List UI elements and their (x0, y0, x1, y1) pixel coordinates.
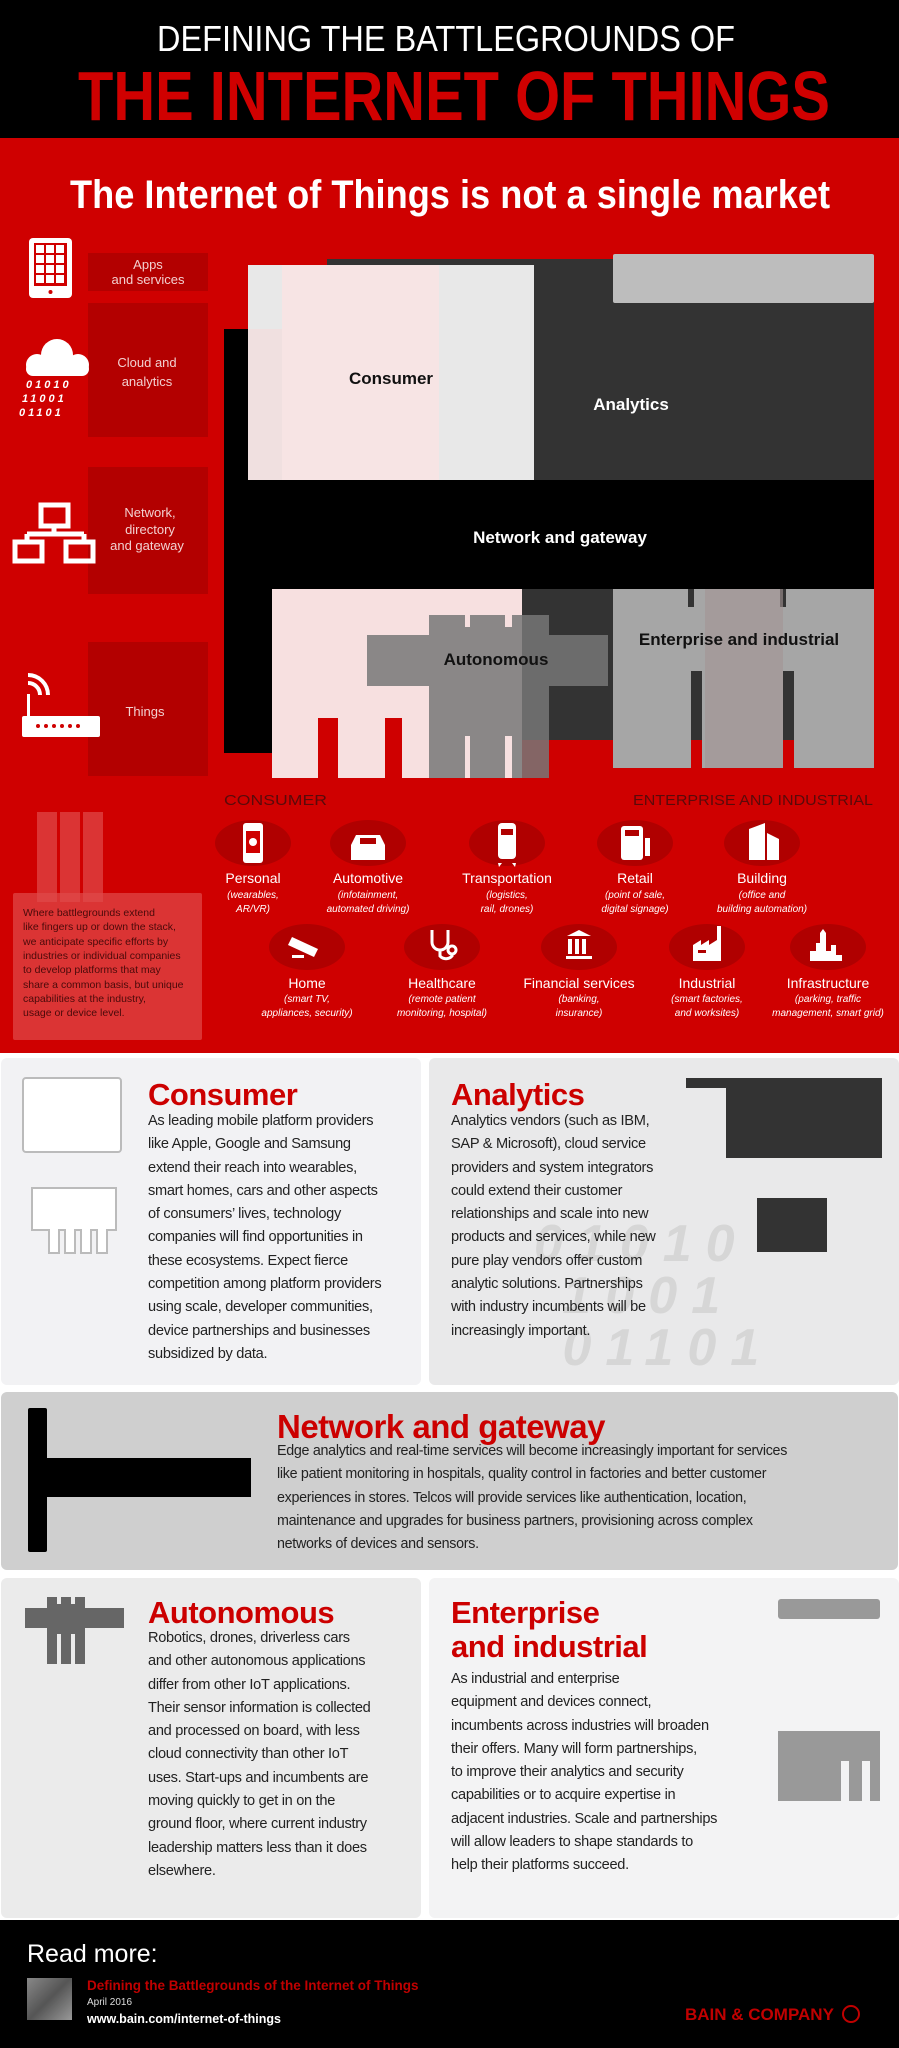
icon row: industries (215, 820, 884, 1019)
panel: analytics: Analytics (451, 1077, 584, 1112)
panel: consumer (1, 1058, 421, 1385)
icon row: industries: digital signage) (601, 904, 669, 915)
icon row: industries: Retail (617, 870, 653, 886)
stack layer: cloud and analytics: analytics (122, 374, 173, 389)
stack layer: things (88, 642, 208, 776)
icon: bank (566, 930, 592, 959)
icon: stethoscope (432, 930, 456, 959)
panel: consumer: As leading mobile platform providers (148, 1113, 373, 1129)
panel: enterprise and industrial: capabilities or to acquire expertise in (451, 1787, 675, 1803)
autonomous block (367, 615, 608, 778)
panel: enterprise and industrial: adjacent industries. Scale and partnerships (451, 1811, 717, 1827)
panel: autonomous: uses. Start-ups and incumbents are (148, 1770, 368, 1786)
analytics block: Analytics (593, 395, 669, 414)
axis labels: CONSUMER (224, 792, 327, 809)
panel: enterprise and industrial: As industrial and enterprise (451, 1671, 619, 1687)
logo: Bain & Company: BAIN & COMPANY (685, 2005, 834, 2024)
stack layer: cloud and analytics (88, 303, 208, 437)
icon row: industries: monitoring, hospital) (397, 1008, 487, 1019)
enterprise block (613, 589, 874, 768)
icon: network hierarchy (15, 505, 93, 561)
panel: network and gateway (1, 1392, 898, 1570)
watermark: binary: 1001 (562, 1267, 734, 1325)
icon row: industries: Building (737, 870, 787, 886)
panel: autonomous: Autonomous (148, 1595, 334, 1630)
callout: fingers note: share a common basis, but unique (23, 979, 184, 991)
panel: enterprise and industrial (429, 1578, 899, 1918)
panel: autonomous: leadership matters less than it does (148, 1840, 367, 1856)
thumbnail (27, 1978, 72, 2020)
panel: network and gateway: experiences in stores. Telcos will provide services like authentication, location, (277, 1490, 746, 1506)
icon row: industries: Industrial (679, 975, 735, 991)
consumer block (248, 265, 534, 480)
network and gateway block (224, 329, 874, 753)
icon row: industries: (point of sale, (605, 890, 665, 901)
panel: autonomous: elsewhere. (148, 1863, 216, 1879)
autonomous block: Autonomous (444, 650, 548, 669)
panel: analytics: providers and system integrators (451, 1160, 653, 1176)
icon: factory (693, 926, 721, 961)
callout: fingers note: to develop platforms that may (23, 964, 161, 976)
stack diagram (224, 254, 874, 778)
stack layer: cloud and analytics: Cloud and (117, 355, 177, 370)
icon: tablet (29, 238, 72, 298)
watermark: binary (534, 1215, 773, 1377)
panel: consumer: companies will find opportunities in (148, 1229, 363, 1245)
icon: enterprise shapes (778, 1599, 880, 1801)
panel: network and gateway: Network and gateway (277, 1408, 605, 1445)
icon: router (22, 675, 100, 737)
panel: enterprise and industrial: incumbents across industries will broaden (451, 1718, 709, 1734)
report link: April 2016 (87, 1997, 132, 2008)
panel: analytics: increasingly important. (451, 1323, 590, 1339)
icon row: industries: (wearables, (227, 890, 279, 901)
panel: analytics (429, 1058, 899, 1385)
panel: enterprise and industrial: their offers. Many will form partnerships, (451, 1741, 697, 1757)
icon: pos terminal (621, 826, 650, 860)
callout: fingers note: usage or device level. (23, 1007, 125, 1019)
network and gateway block: Network and gateway (473, 528, 647, 547)
panel: enterprise and industrial: and industrial (451, 1629, 647, 1664)
header: DEFINING THE BATTLEGROUNDS OF (157, 18, 735, 59)
icon row: industries: (infotainment, (338, 890, 398, 901)
icon row: industries: management, smart grid) (772, 1008, 884, 1019)
panel: autonomous: cloud connectivity than other IoT (148, 1746, 348, 1762)
icon: cloud with binary (19, 339, 89, 419)
stack layer: apps and services: Apps (133, 257, 163, 272)
icon: building (749, 823, 779, 860)
stack layer: network, directory and gateway: and gateway (110, 538, 184, 553)
callout: fingers note (13, 812, 202, 1040)
icon row: industries: rail, drones) (481, 904, 533, 915)
icon row: industries: (office and (739, 890, 786, 901)
panel: consumer: like Apple, Google and Samsung (148, 1136, 351, 1152)
panel: consumer: using scale, developer communities, (148, 1299, 373, 1315)
header (0, 0, 899, 138)
icon: analytics shapes (686, 1078, 882, 1252)
icon: skyline (810, 929, 842, 961)
icon row: industries: (banking, (558, 994, 600, 1005)
icon row: industries: automated driving) (327, 904, 409, 915)
report link (87, 1978, 418, 2026)
icon row: industries: AR/VR) (235, 904, 270, 915)
callout: fingers note: industries or individual companies (23, 950, 181, 962)
panel: consumer: extend their reach into wearables, (148, 1160, 357, 1176)
panel: consumer: smart homes, cars and other aspects (148, 1183, 378, 1199)
panel: autonomous: differ from other IoT applications. (148, 1677, 350, 1693)
footer (0, 1920, 899, 2048)
panel: analytics: with industry incumbents will be (451, 1299, 646, 1315)
panel: analytics: products and services, while new (451, 1229, 656, 1245)
panel: network and gateway: networks of devices and sensors. (277, 1536, 479, 1552)
stack layer: apps and services: and services (112, 272, 185, 287)
stack layer: network, directory and gateway (88, 467, 208, 594)
panel: autonomous: and processed on board, with less (148, 1723, 360, 1739)
panel: consumer: competition among platform providers (148, 1276, 381, 1292)
panel: analytics: analytic solutions. Partnerships (451, 1276, 643, 1292)
top infographic: header, stack diagram, icons (0, 0, 899, 1053)
panel: enterprise and industrial: help their platforms succeed. (451, 1857, 629, 1873)
panel: network and gateway: like patient monitoring in hospitals, quality control in factories and better customer (277, 1466, 766, 1482)
icon row: industries: Healthcare (408, 975, 476, 991)
panel: consumer: of consumers’ lives, technology (148, 1206, 341, 1222)
icon row: industries: (parking, traffic (795, 994, 861, 1005)
icon row: industries: Financial services (523, 975, 635, 991)
icon: network T shape (28, 1408, 251, 1552)
stack layer: apps and services (88, 253, 208, 291)
icon row: industries: appliances, security) (261, 1008, 353, 1019)
enterprise block: Enterprise and industrial (639, 630, 839, 649)
panel: enterprise and industrial: equipment and devices connect, (451, 1694, 651, 1710)
callout: fingers note: capabilities at the industry, (23, 993, 146, 1005)
panel: enterprise and industrial: will allow leaders to shape standards to (451, 1834, 693, 1850)
panel: consumer: subsidized by data. (148, 1346, 267, 1362)
icon: watch (243, 823, 263, 863)
icon: autonomous shape (25, 1597, 124, 1664)
panel: analytics: could extend their customer (451, 1183, 622, 1199)
icon: consumer shapes (22, 1077, 122, 1254)
callout: fingers note: like fingers up or down the stack, (23, 921, 176, 933)
icon row: industries: (remote patient (408, 994, 477, 1005)
icon row: industries: Transportation (462, 870, 552, 886)
icon row: industries: Automotive (333, 870, 403, 886)
panel: network and gateway: maintenance and upgrades for business partners, provisioning across complex (277, 1513, 753, 1529)
panel: enterprise and industrial: Enterprise (451, 1595, 599, 1630)
icon row: industries: (logistics, (486, 890, 528, 901)
panel: autonomous: moving quickly to get in on the (148, 1793, 335, 1809)
icon: cloud with binary: 11001 (22, 393, 67, 405)
callout: fingers note: Where battlegrounds extend (23, 907, 155, 919)
watermark: binary: 01101 (562, 1319, 773, 1377)
read more heading: Read more: (27, 1940, 158, 1968)
report link: www.bain.com/internet-of-things (87, 2012, 281, 2026)
stack layer: network, directory and gateway: Network, (124, 505, 176, 520)
icon: cloud with binary: 01101 (19, 407, 64, 419)
icon row: industries: Infrastructure (787, 975, 869, 991)
stack layer: things: Things (125, 704, 165, 719)
panel: autonomous: ground floor, where current industry (148, 1816, 367, 1832)
panel: analytics: Analytics vendors (such as IBM, (451, 1113, 649, 1129)
icon: car (351, 835, 385, 860)
subtitle: The Internet of Things is not a single market (70, 173, 830, 217)
consumer block: Consumer (349, 369, 433, 388)
icon: cloud with binary: 01010 (26, 379, 72, 391)
lower layers (522, 589, 874, 740)
icon row: industries: insurance) (556, 1008, 602, 1019)
top infographic: header, stack diagram, icons: ENTERPRISE AND INDUSTRIAL (633, 792, 873, 809)
icon: train (498, 823, 516, 867)
icon row: industries: and worksites) (675, 1008, 739, 1019)
panel: consumer: these ecosystems. Expect fierce (148, 1253, 348, 1269)
icon row: industries: (smart factories, (671, 994, 743, 1005)
panel: autonomous: and other autonomous applications (148, 1653, 365, 1669)
report link: Defining the Battlegrounds of the Internet of Things (87, 1978, 418, 1993)
analytics block (327, 254, 874, 482)
panel: analytics: pure play vendors offer custom (451, 1253, 642, 1269)
panel: network and gateway: Edge analytics and real-time services will become increasingly important for services (277, 1443, 787, 1459)
icon row: industries: building automation) (717, 904, 807, 915)
panel: consumer: device partnerships and businesses (148, 1323, 370, 1339)
panel: autonomous: Robotics, drones, driverless cars (148, 1630, 350, 1646)
icon row: industries: Home (288, 975, 326, 991)
panel: analytics: SAP & Microsoft), cloud service (451, 1136, 646, 1152)
panel: autonomous: Their sensor information is collected (148, 1700, 371, 1716)
icon row: industries: (smart TV, (284, 994, 330, 1005)
panel: consumer: Consumer (148, 1077, 297, 1112)
callout: fingers note: we anticipate specific efforts by (22, 936, 169, 948)
watermark: binary: 01010 (534, 1215, 749, 1273)
icon: camera (288, 937, 318, 958)
panel: analytics: relationships and scale into new (451, 1206, 648, 1222)
icon row: industries: Personal (225, 870, 281, 886)
stack layer: network, directory and gateway: directory (125, 522, 175, 537)
panel: autonomous (1, 1578, 421, 1918)
panel: enterprise and industrial: to improve their analytics and security (451, 1764, 683, 1780)
